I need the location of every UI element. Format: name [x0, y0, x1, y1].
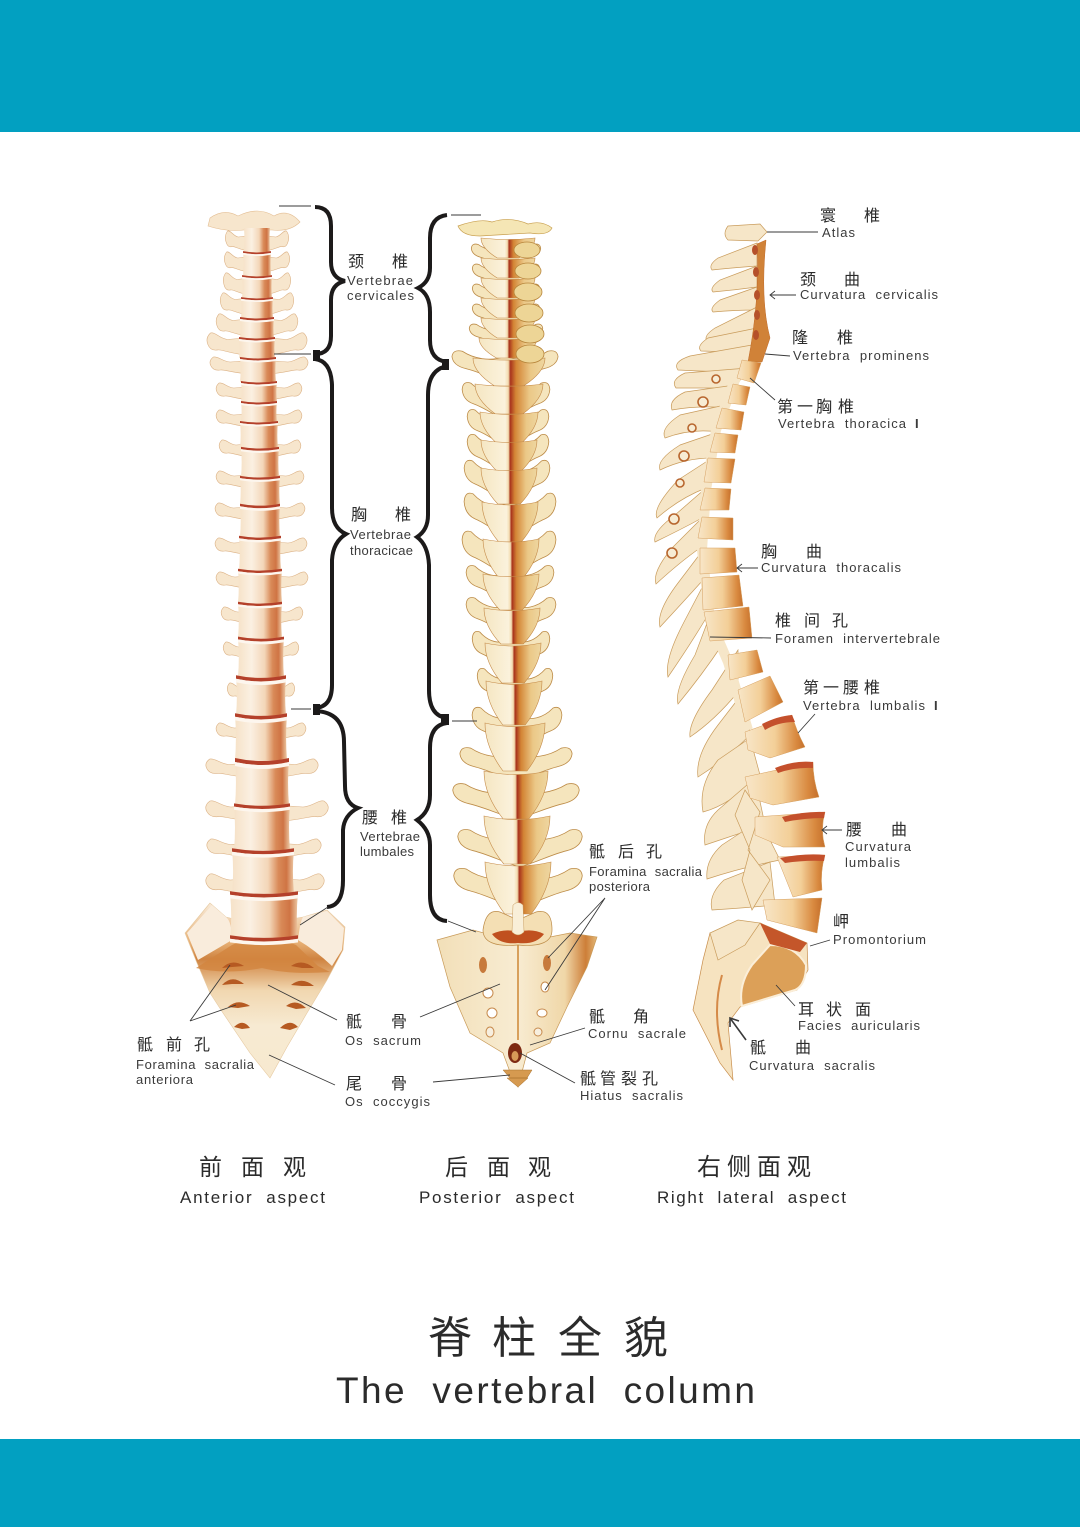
- bracket: posterior lumbar: [417, 723, 447, 921]
- lateral lumbar disc highlights: [762, 715, 825, 863]
- title: 脊柱全貌: [428, 1314, 668, 1363]
- illustration: posterior view of the spine: [437, 219, 597, 1087]
- label: promontory: [833, 913, 926, 947]
- bracket: posterior thoracic: [417, 366, 447, 718]
- label: posterior sacral foramina: posteriora: [589, 879, 651, 894]
- bracket: anterior thoracic: [315, 359, 346, 708]
- label: sacral cornu: [588, 1008, 686, 1041]
- illustration: right lateral view of the spine: [655, 224, 825, 1080]
- label: coccyx: [345, 1076, 430, 1109]
- label: vertebra prominens: 隆椎: [792, 329, 853, 347]
- label: lumbar vertebrae: [360, 809, 420, 859]
- lateral vertebral bodies: [698, 360, 825, 933]
- label: promontory: 岬: [833, 913, 849, 931]
- lateral spinous and articular processes: [655, 224, 780, 960]
- label: thoracic curvature: [761, 543, 902, 575]
- bracket: anterior lumbar: [315, 711, 358, 907]
- illustration: anterior view of the spine: [185, 211, 345, 1078]
- label: sacral cornu: Cornu sacrale: [588, 1026, 686, 1041]
- label: cervical vertebrae: [347, 253, 414, 303]
- label: anterior sacral foramina: Foramina sacralia: [136, 1057, 255, 1072]
- label: sacrum: [345, 1013, 421, 1048]
- label: sacrum: Os sacrum: [345, 1033, 421, 1048]
- label: sacral curvature: Curvatura sacralis: [749, 1058, 876, 1073]
- label: promontory: Promontorium: [833, 932, 926, 947]
- label: posterior sacral foramina: 骶后孔: [589, 843, 662, 861]
- bottom teal band: [0, 1439, 1080, 1527]
- label: lumbar curvature: Curvatura: [845, 839, 912, 854]
- arrows on the lateral view: [730, 291, 842, 1040]
- label: first lumbar vertebra: 第一腰椎: [803, 679, 880, 697]
- posterior transverse processes: [452, 244, 582, 908]
- caption: right lateral aspect: [657, 1154, 846, 1207]
- posterior sacrum and coccyx: [437, 930, 597, 1087]
- label: auricular surface: [798, 1001, 920, 1033]
- label: thoracic curvature: Curvatura thoracalis: [761, 560, 902, 575]
- label: sacral hiatus: [580, 1070, 684, 1103]
- lateral cervical anterior column: [748, 240, 770, 362]
- label: first thoracic vertebra: [777, 398, 919, 431]
- lateral articular column: [702, 372, 748, 730]
- label: sacral curvature: 骶曲: [750, 1039, 811, 1057]
- caption: posterior aspect: 后面观: [445, 1154, 551, 1180]
- anterior transverse processes: [206, 211, 328, 896]
- anterior sacrum: [185, 903, 345, 1078]
- label: vertebra prominens: [792, 329, 930, 363]
- label: posterior sacral foramina: [589, 843, 703, 894]
- label: anterior sacral foramina: [136, 1036, 255, 1087]
- posterior laminae and spinous line: [473, 238, 551, 914]
- label: anterior sacral foramina: anteriora: [136, 1072, 194, 1087]
- label: thoracic vertebrae: 胸椎: [351, 506, 411, 524]
- label: first lumbar vertebra: [803, 679, 938, 713]
- leader lines: [190, 206, 830, 1085]
- label: anterior sacral foramina: 骶前孔: [137, 1036, 210, 1054]
- label: thoracic vertebrae: thoracicae: [350, 543, 413, 558]
- label: lumbar curvature: 腰曲: [846, 821, 907, 839]
- title: [336, 1314, 755, 1411]
- label: cervical vertebrae: Vertebrae: [347, 273, 413, 288]
- caption: posterior aspect: Posterior aspect: [419, 1188, 574, 1207]
- posterior cervical articular pillars: [514, 242, 544, 363]
- label: auricular surface: Facies auricularis: [798, 1018, 920, 1033]
- anterior intervertebral discs: [230, 251, 298, 945]
- label: lumbar curvature: lumbalis: [845, 855, 900, 870]
- label: cervical vertebrae: 颈椎: [348, 253, 408, 271]
- lateral cervical foramina: [752, 245, 760, 340]
- label: atlas: Atlas: [822, 225, 856, 240]
- posterior lumbar arch: [483, 902, 552, 945]
- bracket: anterior cervical: [315, 207, 345, 354]
- label: intervertebral foramen: 椎间孔: [775, 612, 848, 630]
- label: sacrum: 骶骨: [346, 1013, 407, 1031]
- posterior top wings: [458, 219, 552, 236]
- label: lumbar vertebrae: 腰椎: [362, 809, 407, 827]
- caption: posterior aspect: [419, 1154, 574, 1207]
- label: cervical curvature: Curvatura cervicalis: [800, 287, 938, 302]
- label: thoracic curvature: 胸曲: [761, 543, 822, 561]
- caption: anterior aspect: Anterior aspect: [180, 1188, 325, 1207]
- label: first lumbar vertebra: Vertebra lumbalis: [803, 698, 926, 713]
- label: coccyx: Os coccygis: [345, 1094, 430, 1109]
- label: auricular surface: 耳状面: [798, 1001, 871, 1019]
- lateral rib facets: [667, 375, 720, 558]
- label: atlas: 寰椎: [820, 206, 880, 225]
- label: sacral hiatus: Hiatus sacralis: [580, 1088, 684, 1103]
- label: sacral hiatus: 骶管裂孔: [580, 1070, 658, 1088]
- lateral sacrum and coccyx: [693, 923, 808, 1080]
- label: first thoracic vertebra: Vertebra thoracica: [778, 416, 907, 431]
- caption: anterior aspect: 前面观: [199, 1154, 306, 1180]
- label: thoracic vertebrae: [350, 506, 413, 558]
- label: thoracic vertebrae: Vertebrae: [350, 527, 411, 542]
- caption: right lateral aspect: Right lateral aspect: [657, 1188, 846, 1207]
- anterior vertebral bodies: [230, 228, 298, 940]
- label: sacral curvature: [749, 1039, 876, 1073]
- label: coccyx: 尾骨: [346, 1076, 407, 1093]
- label: first thoracic vertebra: 第一胸椎: [777, 398, 854, 416]
- label: lumbar curvature: [845, 821, 912, 870]
- label: atlas: [820, 206, 880, 240]
- bracket joints: [313, 350, 449, 725]
- label: first thoracic vertebra: I: [915, 416, 919, 431]
- caption: anterior aspect: [180, 1154, 325, 1207]
- label: sacral cornu: 骶角: [589, 1008, 649, 1026]
- label: cervical curvature: [800, 271, 938, 302]
- label: posterior sacral foramina: Foramina sacralia: [589, 864, 703, 879]
- top teal band: [0, 0, 1080, 132]
- label: cervical curvature: 颈曲: [800, 271, 860, 289]
- label: vertebra prominens: Vertebra prominens: [793, 348, 930, 363]
- label: cervical vertebrae: cervicales: [347, 288, 414, 303]
- label: lumbar vertebrae: lumbales: [360, 844, 414, 859]
- label: intervertebral foramen: Foramen intervertebrale: [775, 631, 940, 646]
- title: The vertebral column: [336, 1370, 755, 1411]
- bracket: posterior cervical: [418, 215, 447, 362]
- label: intervertebral foramen: [775, 612, 940, 646]
- caption: right lateral aspect: 右侧面观: [697, 1154, 811, 1181]
- label: first lumbar vertebra: I: [934, 698, 938, 713]
- label: lumbar vertebrae: Vertebrae: [360, 829, 420, 844]
